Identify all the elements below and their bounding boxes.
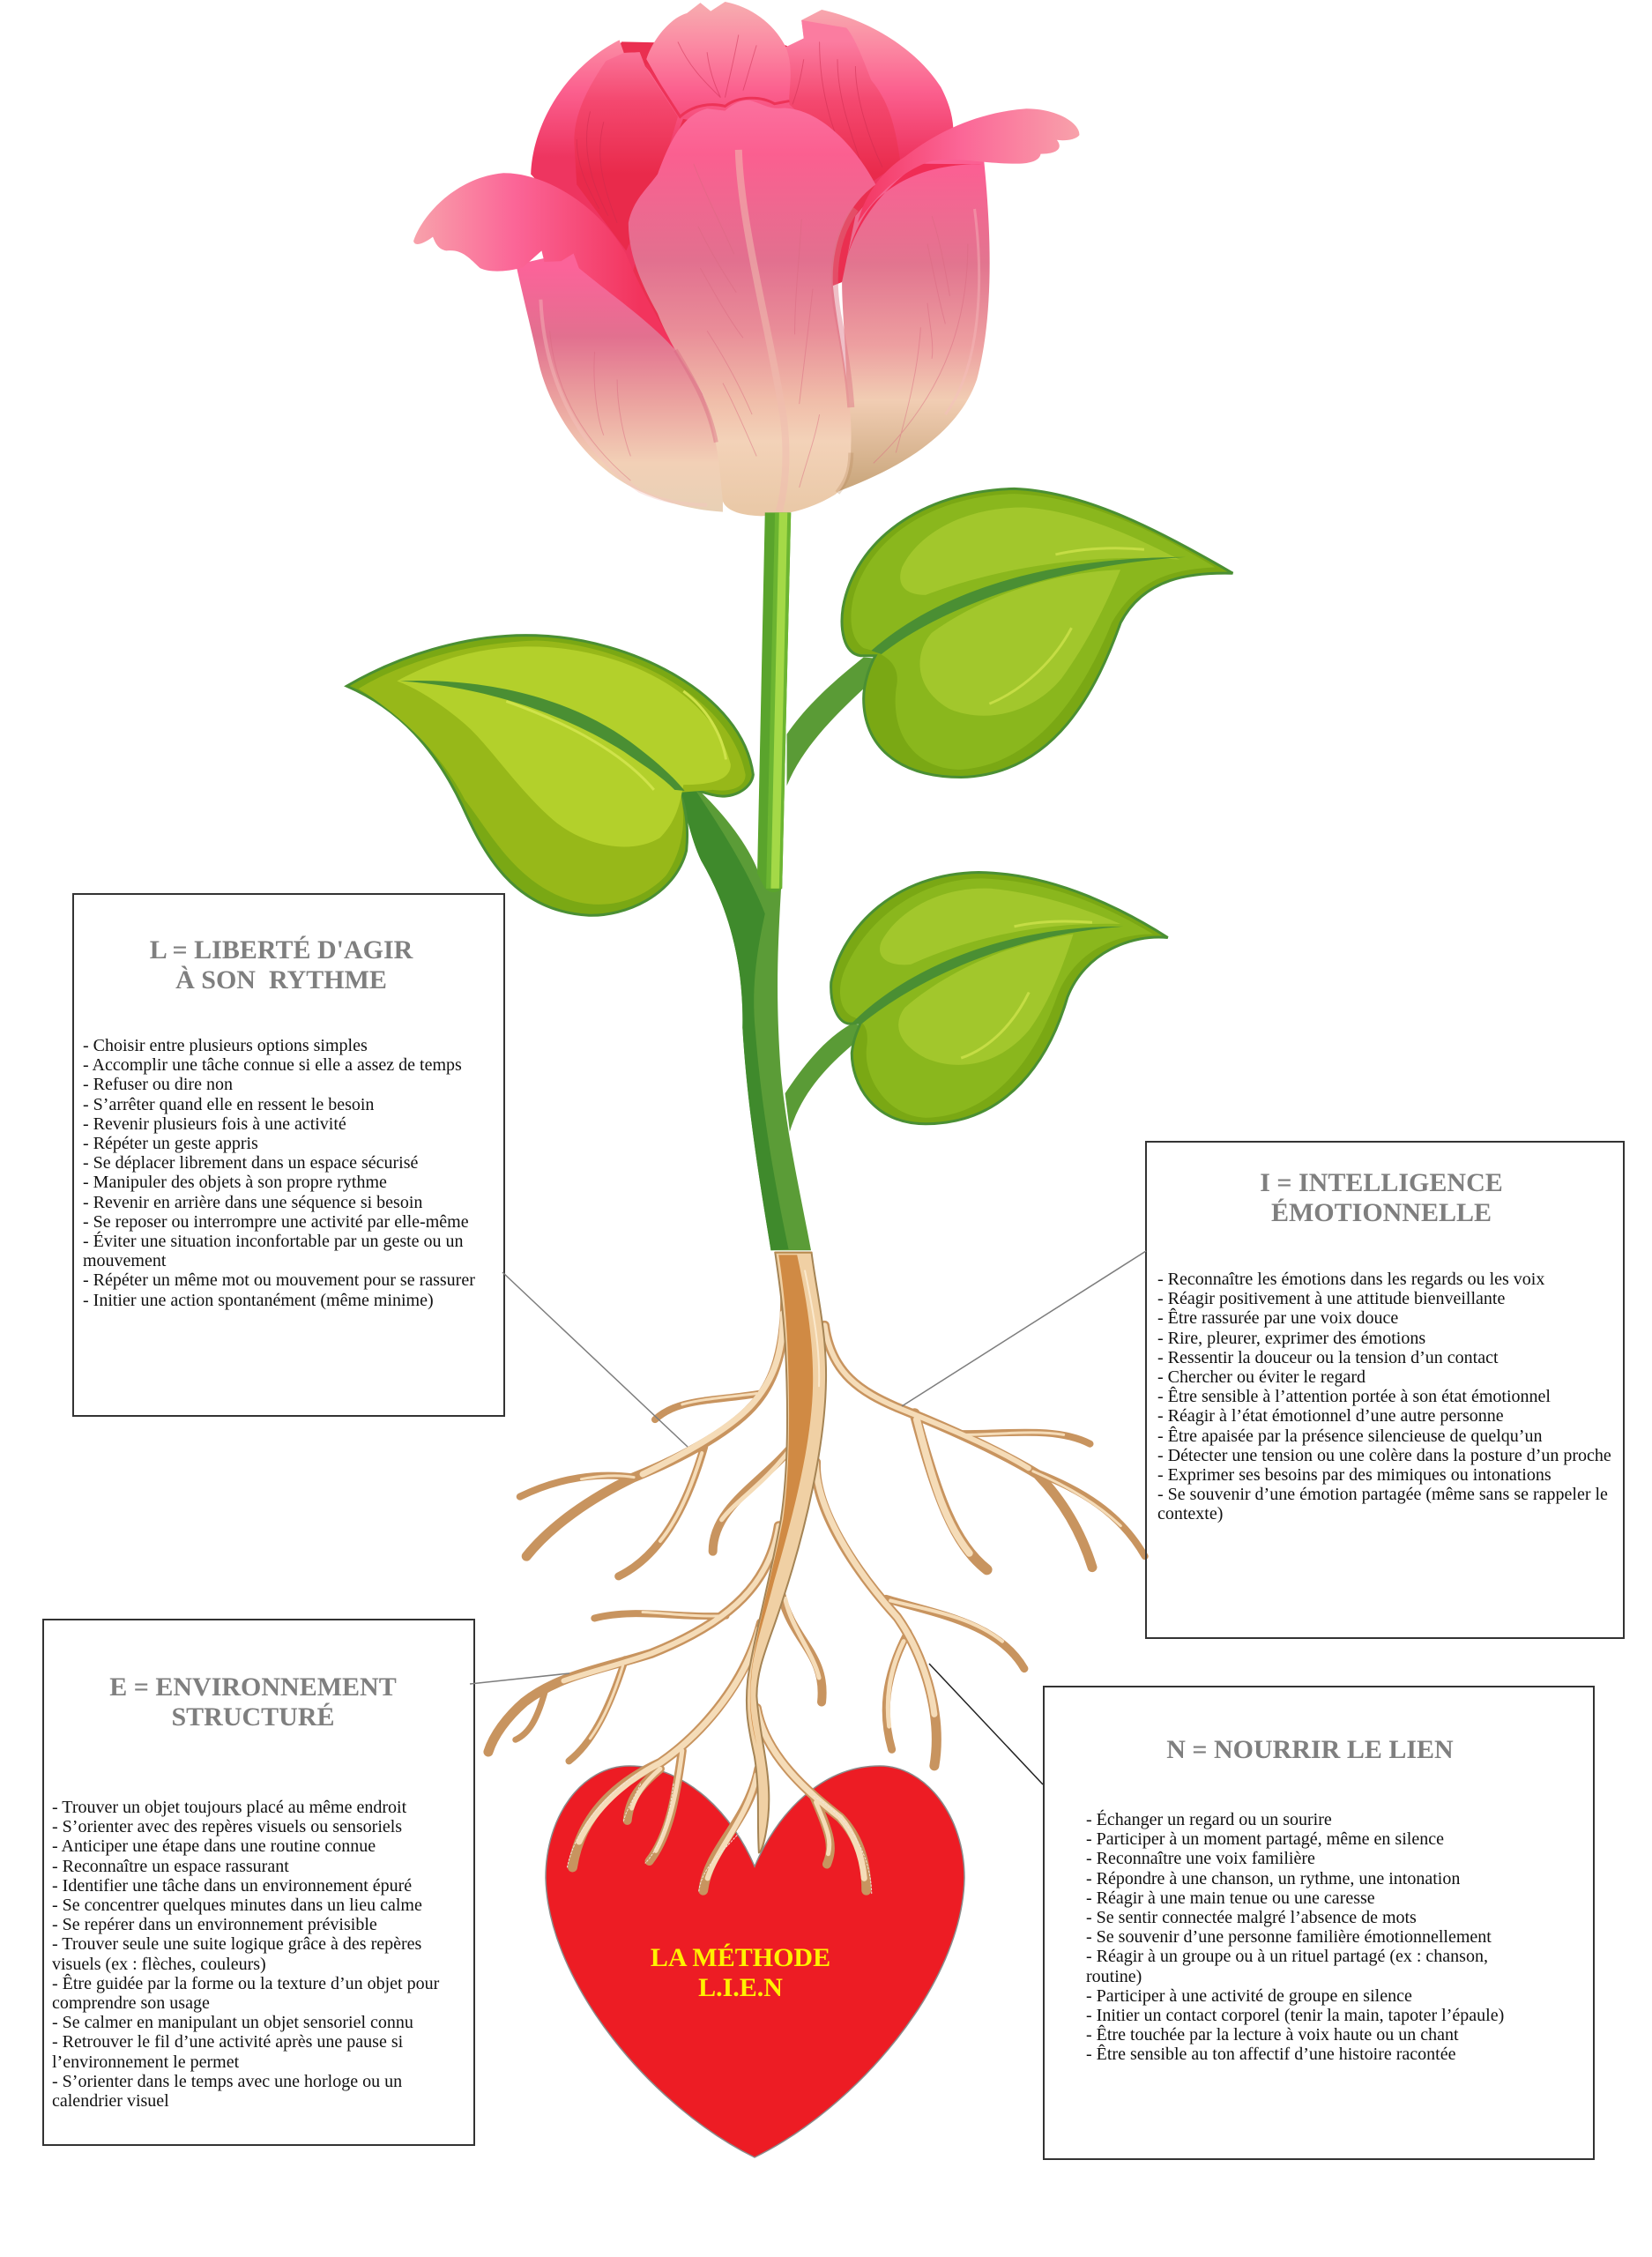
text: E list: - Être guidée par la forme ou la texture d’un objet pour — [52, 1974, 439, 1993]
text: L list: - Répéter un geste appris — [83, 1134, 258, 1153]
text: I list: - Chercher ou éviter le regard — [1157, 1367, 1366, 1387]
text: E list: calendrier visuel — [52, 2091, 169, 2111]
text: L list: - Manipuler des objets à son propre rythme — [83, 1173, 387, 1192]
text: I list: - Réagir positivement à une attitude bienveillante — [1157, 1289, 1505, 1308]
text: L list: - S’arrêter quand elle en ressent le besoin — [83, 1095, 374, 1114]
text: E list: visuels (ex : flèches, couleurs) — [52, 1955, 266, 1974]
text: I list: - Exprimer ses besoins par des mimiques ou intonations — [1157, 1465, 1552, 1485]
heart — [546, 1766, 964, 2157]
heading: N: N = NOURRIR LE LIEN — [1166, 1735, 1454, 1764]
text: L list: - Revenir plusieurs fois à une activité — [83, 1114, 346, 1134]
panel: E environnement structuré — [42, 1619, 475, 2146]
text: E list: - S’orienter dans le temps avec une horloge ou un — [52, 2072, 402, 2091]
roots — [488, 1253, 1145, 1894]
text: E list: - S’orienter avec des repères visuels ou sensoriels — [52, 1817, 402, 1836]
text: N list: routine) — [1086, 1967, 1142, 1986]
stem and leaves — [346, 488, 1232, 1250]
text: L list: - Revenir en arrière dans une séquence si besoin — [83, 1193, 422, 1212]
text: L list: - Répéter un même mot ou mouvement pour se rassurer — [83, 1270, 475, 1290]
root outlines — [488, 1295, 1145, 1890]
panel: I intelligence émotionnelle — [1145, 1141, 1625, 1639]
connector: I — [902, 1251, 1146, 1406]
text: I list: - Être rassurée par une voix douce — [1157, 1308, 1398, 1328]
connector: N — [929, 1664, 1043, 1784]
text: E list: - Identifier une tâche dans un environnement épuré — [52, 1876, 412, 1896]
main stem — [676, 786, 811, 1250]
text: N list — [1086, 1809, 1504, 2064]
text: E list — [52, 1798, 439, 2111]
heading: E: E = ENVIRONNEMENT STRUCTURÉ — [109, 1672, 397, 1732]
text: N list: - Réagir à une main tenue ou une caresse — [1086, 1888, 1375, 1908]
text: I list: - Détecter une tension ou une colère dans la posture d’un proche — [1157, 1446, 1611, 1465]
text: L list: - Initier une action spontanément (même minime) — [83, 1291, 434, 1310]
heading: I: I = INTELLIGENCE ÉMOTIONNELLE — [1260, 1168, 1503, 1227]
left front petal — [516, 250, 723, 512]
central front petal — [629, 101, 875, 516]
right flap petal — [858, 108, 1079, 223]
heart title — [651, 1943, 830, 2002]
lower right leaf — [831, 872, 1168, 1124]
text: E list: - Retrouver le fil d’une activité après une pause si — [52, 2032, 403, 2052]
upper stem — [757, 512, 791, 892]
right front petal — [837, 157, 990, 492]
panel: L liberté d'agir — [72, 893, 505, 1417]
root highlights — [564, 1314, 1120, 1878]
upper right petiole — [787, 657, 875, 786]
tulip flower — [413, 2, 1079, 516]
text: N list: - Participer à un moment partagé, même en silence — [1086, 1829, 1444, 1849]
red petal underside — [842, 164, 981, 279]
stem dark side — [676, 786, 789, 1250]
panel: N nourrir le lien — [1043, 1686, 1595, 2160]
text: I list: - Être apaisée par la présence silencieuse de quelqu’un — [1157, 1426, 1542, 1446]
lower right petiole — [785, 1024, 860, 1131]
text: L list: - Refuser ou dire non — [83, 1075, 233, 1094]
text: E list: - Trouver un objet toujours placé au même endroit — [52, 1798, 406, 1817]
back petals — [531, 2, 954, 348]
taproot — [747, 1253, 826, 1852]
heart title: LA MÉTHODE — [651, 1943, 830, 1972]
text: L list: - Se reposer ou interrompre une activité par elle-même — [83, 1212, 469, 1232]
text: N list: - Initier un contact corporel (tenir la main, tapoter l’épaule) — [1086, 2006, 1504, 2025]
text: N list: - Se sentir connectée malgré l’absence de mots — [1086, 1908, 1417, 1927]
connector: L — [502, 1272, 688, 1447]
text: L list: mouvement — [83, 1251, 166, 1270]
text: E list: - Se repérer dans un environnement prévisible — [52, 1915, 377, 1934]
text: I list: - Ressentir la douceur ou la tension d’un contact — [1157, 1348, 1499, 1367]
text: N list: - Échanger un regard ou un sourire — [1086, 1810, 1332, 1829]
text: N list: - Être touchée par la lecture à voix haute ou un chant — [1086, 2025, 1459, 2045]
text: I list: - Être sensible à l’attention portée à son état émotionnel — [1157, 1387, 1551, 1406]
connector: E — [470, 1673, 569, 1684]
text: N list: - Réagir à un groupe ou à un rituel partagé (ex : chanson, — [1086, 1947, 1488, 1966]
text: I list: - Réagir à l’état émotionnel d’une autre personne — [1157, 1406, 1504, 1426]
text: E list: - Reconnaître un espace rassurant — [52, 1857, 289, 1876]
text: L list: - Accomplir une tâche connue si elle a assez de temps — [83, 1055, 462, 1075]
text: E list: - Se concentrer quelques minutes dans un lieu calme — [52, 1896, 422, 1915]
left leaf — [346, 636, 753, 915]
text: I list: - Se souvenir d’une émotion partagée (même sans se rappeler le — [1157, 1485, 1608, 1504]
text: N list: - Se souvenir d’une personne familière émotionnellement — [1086, 1927, 1492, 1947]
heading: L: L = LIBERTÉ D'AGIR À SON RYTHME — [150, 935, 413, 994]
text: I list — [1157, 1270, 1611, 1523]
petal veins — [540, 150, 979, 512]
heart title: L.I.E.N — [698, 1973, 783, 2002]
text: I list: - Reconnaître les émotions dans les regards ou les voix — [1157, 1270, 1544, 1289]
text: E list: comprendre son usage — [52, 1993, 210, 2013]
text: E list: l’environnement le permet — [52, 2052, 239, 2072]
text: L list: - Éviter une situation inconfortable par un geste ou un — [83, 1232, 464, 1251]
text: N list: - Participer à une activité de groupe en silence — [1086, 1986, 1412, 2006]
text: I list: contexte) — [1157, 1504, 1223, 1523]
text: E list: - Se calmer en manipulant un objet sensoriel connu — [52, 2013, 413, 2032]
text: E list: - Anticiper une étape dans une routine connue — [52, 1836, 376, 1856]
text: E list: - Trouver seule une suite logique grâce à des repères — [52, 1934, 421, 1954]
heart root dotted edges — [567, 1775, 872, 1894]
text: N list: - Répondre à une chanson, un rythme, une intonation — [1086, 1869, 1460, 1888]
text: L list: - Choisir entre plusieurs options simples — [83, 1036, 368, 1055]
left flap petal — [413, 173, 674, 349]
upper right leaf — [842, 488, 1232, 778]
text: L list: - Se déplacer librement dans un espace sécurisé — [83, 1153, 418, 1173]
text: N list: - Reconnaître une voix familière — [1086, 1849, 1315, 1868]
text: N list: - Être sensible au ton affectif d’une histoire racontée — [1086, 2045, 1455, 2064]
text: I list: - Rire, pleurer, exprimer des émotions — [1157, 1329, 1425, 1348]
text: L list — [83, 1036, 475, 1310]
